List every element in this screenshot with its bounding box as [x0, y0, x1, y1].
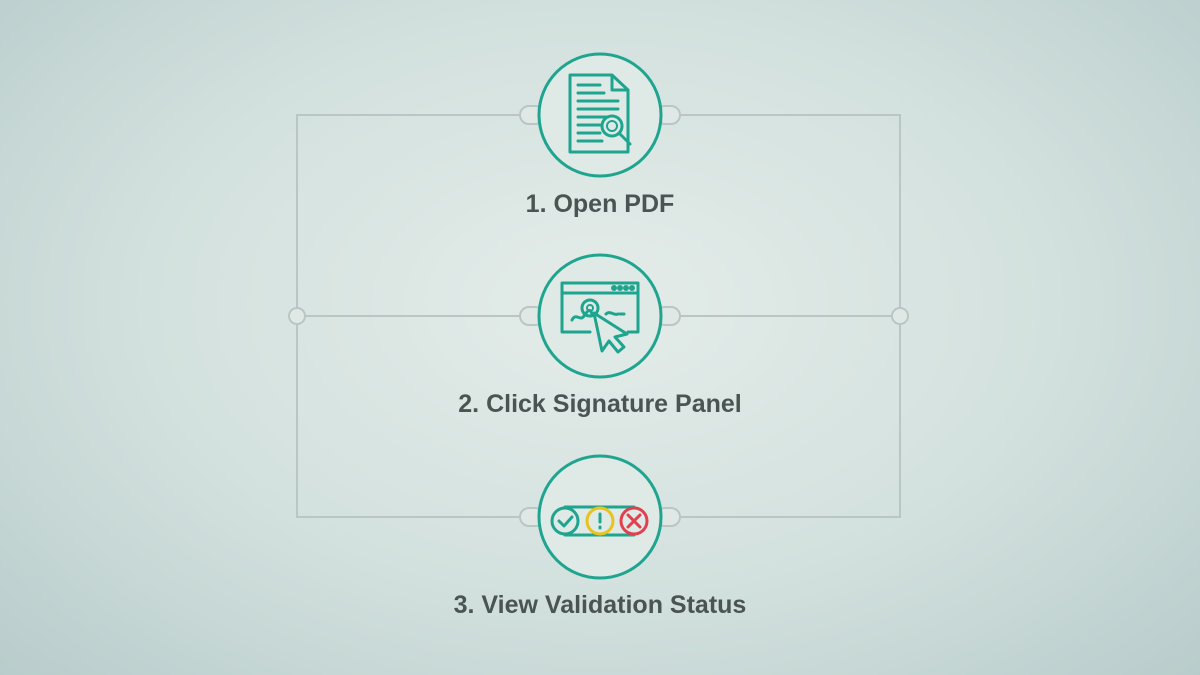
icon: open pdf — [539, 54, 661, 176]
label 3: 3. View Validation Status — [454, 591, 746, 619]
label 2: 2. Click Signature Panel — [458, 390, 742, 418]
icon: signature panel — [539, 255, 661, 377]
label 1: 1. Open PDF — [526, 190, 674, 218]
icon: validation status — [539, 456, 661, 578]
